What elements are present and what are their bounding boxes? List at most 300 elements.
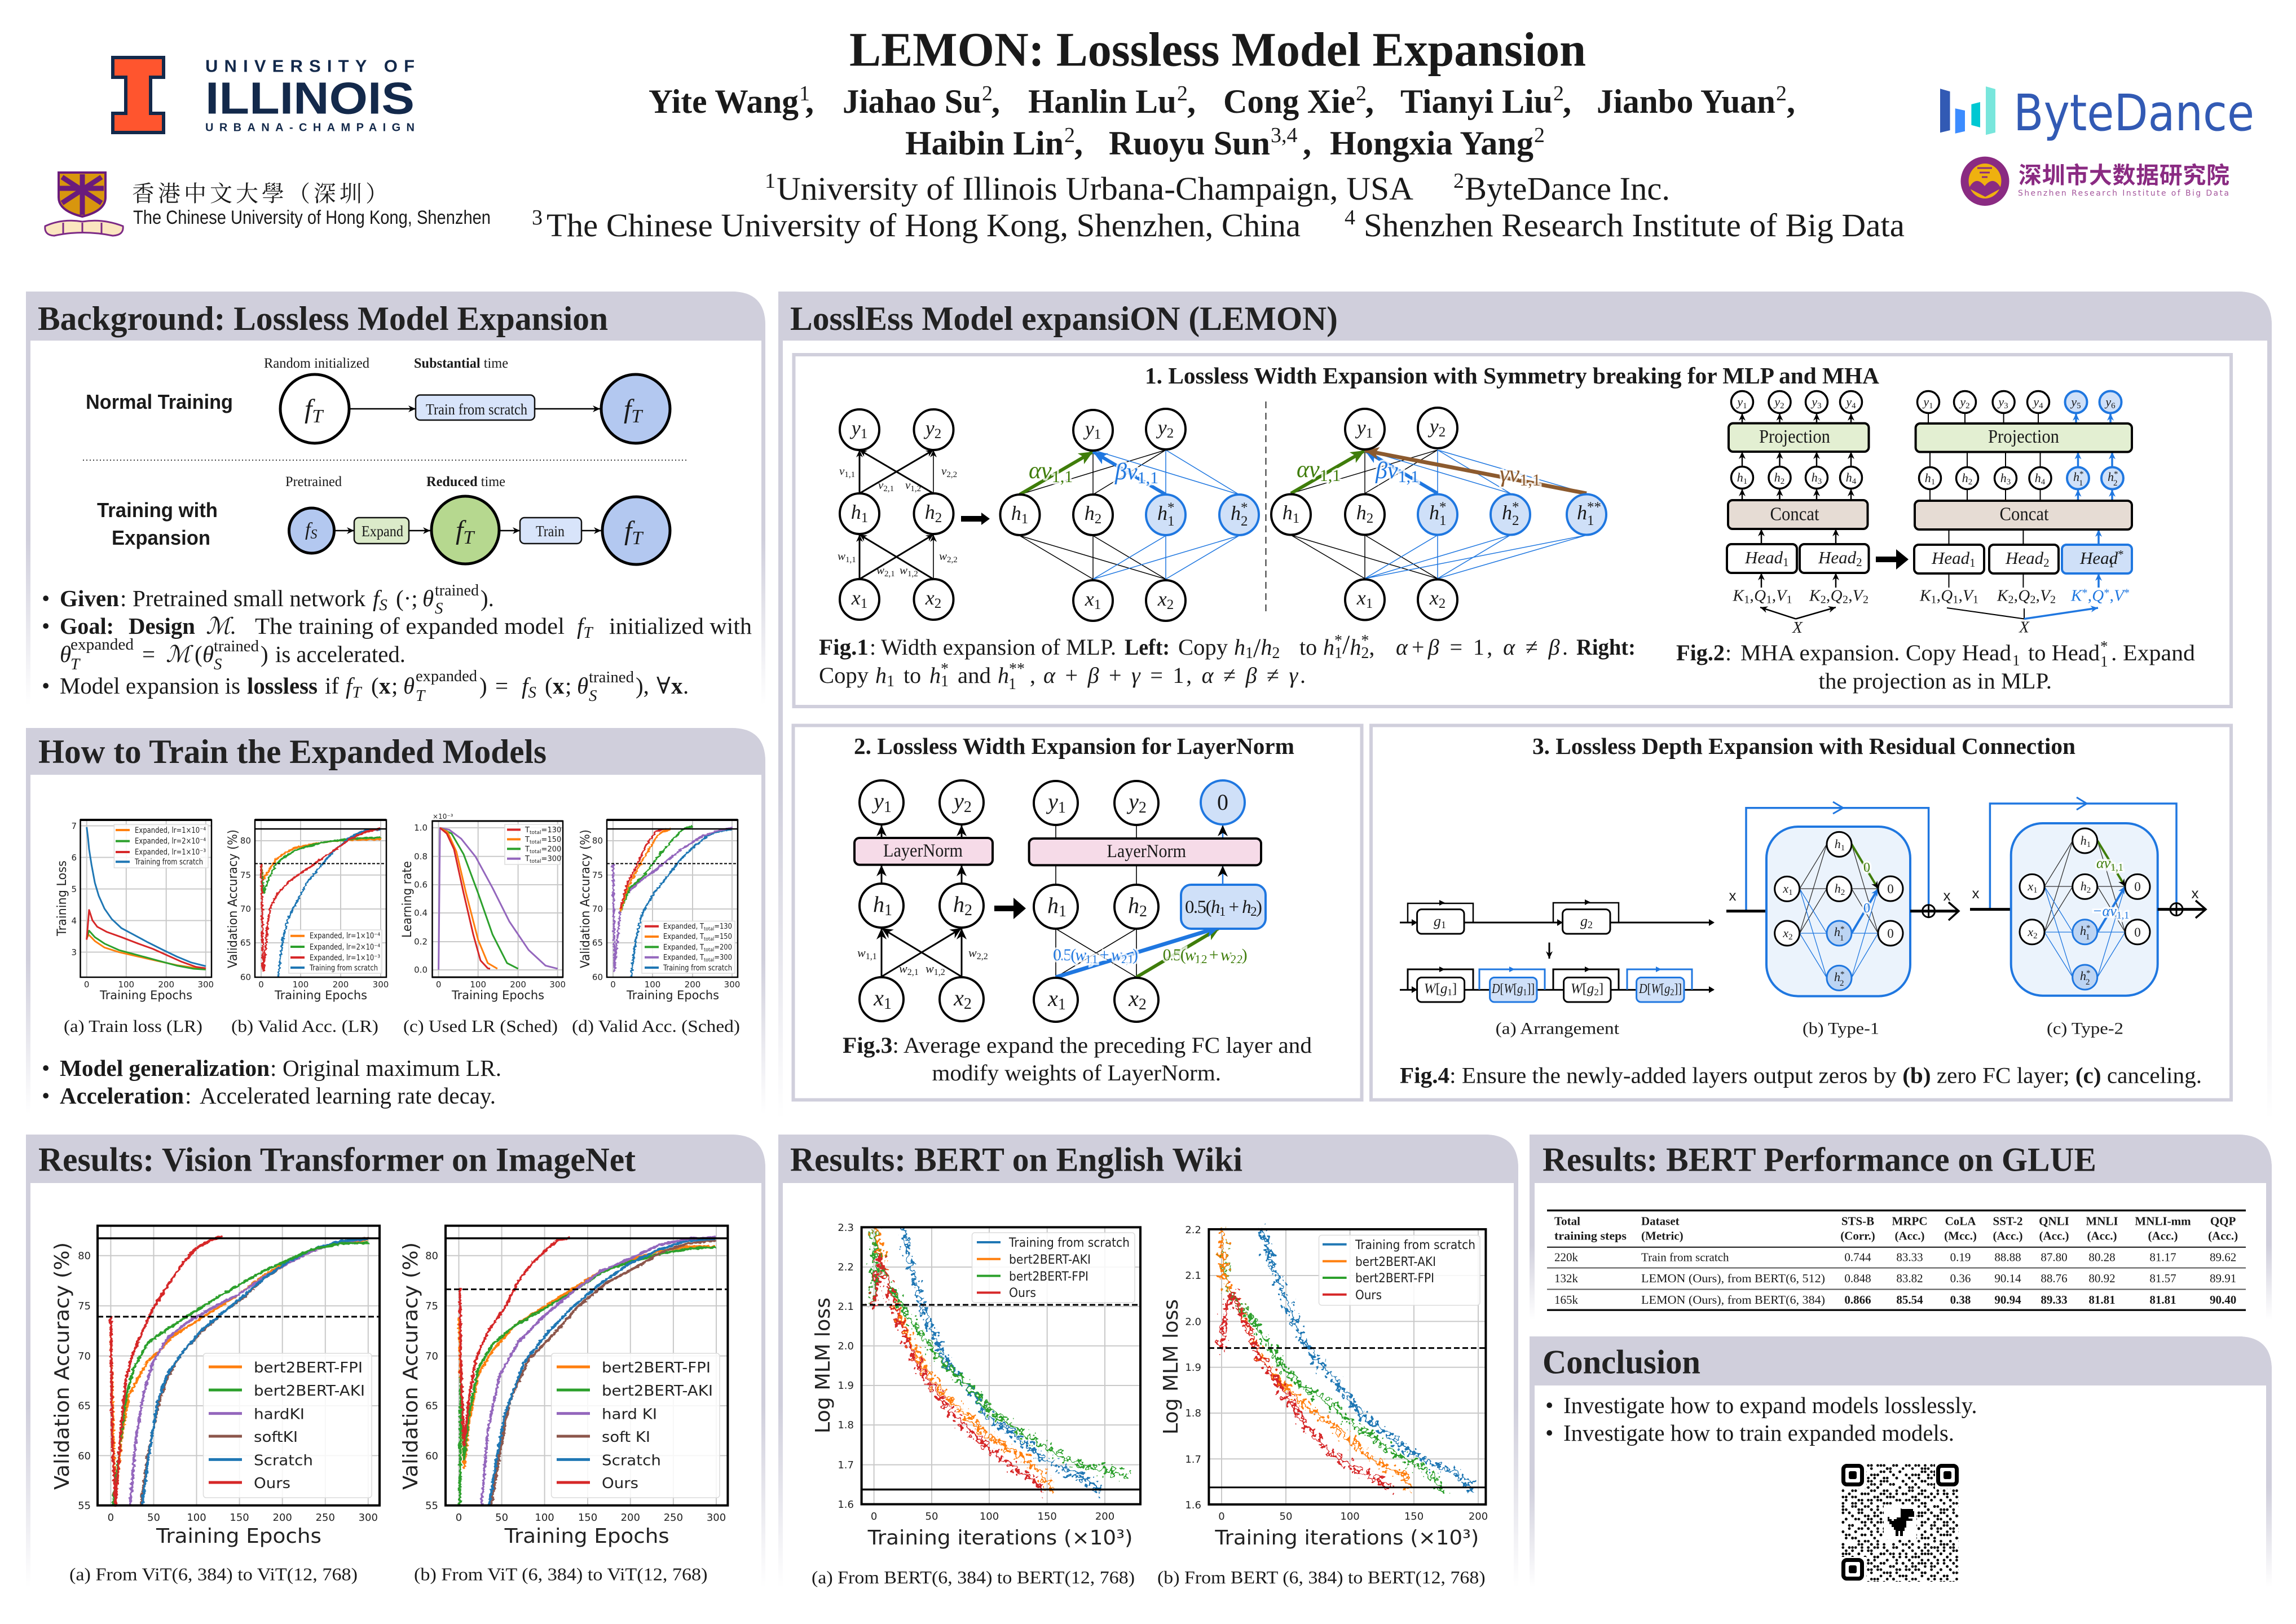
text block: background bullets: • xyxy=(42,585,50,611)
diagram: MHA expansion: h xyxy=(2108,470,2114,484)
caption: Fig.1: ** xyxy=(1009,660,1025,678)
chart: valid acc sched: total xyxy=(704,937,714,942)
diagram: MLP expansion right: * xyxy=(1439,500,1446,515)
diagram: MLP expansion right: 1 xyxy=(1293,511,1299,526)
diagram: LayerNorm original: y xyxy=(954,788,964,814)
diagram: type-2: 1 xyxy=(2086,933,2090,942)
chart: valid acc lr: 80 xyxy=(240,836,251,846)
text block: background bullets: T xyxy=(583,624,593,642)
diagram: LayerNorm expansion: ) xyxy=(1132,946,1138,964)
chart: ViT b: 200 xyxy=(621,1512,640,1524)
diagram: MLP original: 2 xyxy=(935,596,941,611)
caption: Fig.1: , xyxy=(1030,663,1035,688)
text block: training bullets: Model generalization xyxy=(60,1055,270,1081)
table: GLUE: 83.82 xyxy=(1896,1272,1923,1285)
chart: used lr: 200 xyxy=(510,979,526,990)
affiliations xyxy=(532,169,1905,244)
diagram: type-1: 2 xyxy=(1841,888,1845,897)
chart: valid acc lr: 60 xyxy=(240,972,251,982)
diagram: MLP original: v xyxy=(941,464,946,478)
diagram: LayerNorm expansion: 2,2 xyxy=(1231,952,1243,966)
diagram: type-1: h xyxy=(1835,837,1841,851)
chart: valid acc sched: 65 xyxy=(592,938,603,948)
diagram: LayerNorm expansion: x xyxy=(1129,986,1139,1011)
chart: valid acc sched xyxy=(579,820,740,1002)
diagram: MHA expansion: V xyxy=(2040,587,2050,605)
chart: BERT a: 1.7 xyxy=(838,1459,854,1471)
chart: ViT a: hardKI xyxy=(254,1406,305,1423)
diagram: MHA expansion: 2 xyxy=(1966,401,1970,411)
text block: background bullets: S xyxy=(589,687,597,705)
chart: ViT a: Validation Accuracy (%) xyxy=(51,1242,74,1490)
diagram: arrangement: W[g xyxy=(1424,981,1447,996)
chart: BERT a: 2.1 xyxy=(838,1301,854,1313)
diagram: MHA expansion: 1 xyxy=(1931,478,1935,487)
affiliations: ByteDance Inc. xyxy=(1465,170,1670,207)
caption: Fig.3: Fig.3: Average expand the preceding FC layer and xyxy=(843,1032,1312,1058)
authors: Cong Xie xyxy=(1223,83,1355,120)
diagram: MLP expansion right: x xyxy=(1430,586,1439,609)
chart: valid acc lr xyxy=(226,820,389,1002)
chart: BERT b: 1.6 xyxy=(1185,1499,1201,1511)
chart: BERT a: 2.2 xyxy=(838,1261,854,1273)
caption: Fig.1: α+β = 1, α ≠ β. xyxy=(1396,634,1568,660)
chart: BERT a: 1.8 xyxy=(838,1419,854,1431)
diagram: LayerNorm original: LayerNorm xyxy=(883,841,963,861)
QR code xyxy=(1840,1463,1961,1583)
diagram: MLP expansion left: 2 xyxy=(1167,597,1174,612)
chart: valid acc sched: 60 xyxy=(592,972,603,982)
caption: Fig.2: * xyxy=(2100,638,2108,655)
diagram: type-2: 0 xyxy=(2134,925,2141,939)
diagram: MHA expansion: , xyxy=(2088,587,2092,605)
text block: background bullets: S xyxy=(214,655,222,673)
diagram: LayerNorm expansion: w xyxy=(1111,946,1122,964)
chart: train loss: Expanded, lr=1×10⁻³ xyxy=(135,848,206,857)
authors: 2 xyxy=(1356,82,1367,105)
chart: used lr: 0.6 xyxy=(414,880,428,890)
table: GLUE: (Acc.) xyxy=(1993,1229,2023,1243)
diagram: MLP original: v xyxy=(878,478,883,492)
diagram: type-2 xyxy=(1970,797,2206,1038)
diagram: MHA expansion: Head xyxy=(2006,548,2043,568)
chart: BERT b: 200 xyxy=(1469,1511,1488,1522)
chart: used lr: total xyxy=(530,830,541,836)
text block: training bullets: • xyxy=(42,1055,50,1081)
chart: valid acc lr: Expanded, lr=2×10⁻⁴ xyxy=(310,943,380,952)
diagram: MHA original: V xyxy=(1776,587,1786,605)
text block: conclusion bullets: • xyxy=(1545,1420,1553,1446)
text block: conclusion bullets: • xyxy=(1545,1392,1553,1418)
diagram: normal training: T xyxy=(312,406,324,427)
chart: ViT b: bert2BERT-FPI xyxy=(602,1360,711,1376)
chart: train loss: Training Loss xyxy=(55,860,69,937)
diagram: MHA expansion: 6 xyxy=(2111,401,2116,411)
chart captions xyxy=(64,1016,740,1036)
logo: University of Illinois xyxy=(113,56,415,134)
diagram: type-2: h xyxy=(2080,924,2086,938)
chart: ViT a: 60 xyxy=(78,1450,91,1462)
diagram: LayerNorm original: 1 xyxy=(884,995,892,1013)
text block: background bullets: • xyxy=(42,673,50,699)
chart: train loss: Expanded, lr=1×10⁻⁴ xyxy=(135,826,206,835)
diagram: LayerNorm original: 2,2 xyxy=(977,952,988,961)
text block: background bullets: initialized with xyxy=(609,613,752,639)
chart: valid acc sched: 80 xyxy=(592,836,603,846)
diagram: LayerNorm expansion: 1 xyxy=(1058,799,1066,817)
diagram: MHA expansion xyxy=(1914,391,2132,637)
diagram: LayerNorm expansion: y xyxy=(1048,789,1058,814)
chart: valid acc sched: 70 xyxy=(592,904,603,914)
text block: background bullets: f xyxy=(522,673,528,699)
chart: BERT b: Log MLM loss xyxy=(1160,1299,1183,1435)
diagram: type-2: 1 xyxy=(2033,886,2038,895)
chart: used lr: =150 xyxy=(541,836,561,844)
table: GLUE: (Metric) xyxy=(1641,1229,1684,1243)
heading: LEMON: LosslEss Model expansiON (LEMON) xyxy=(790,300,1338,337)
authors: Tianyi Liu xyxy=(1400,83,1553,120)
chart: train loss: 7 xyxy=(71,821,77,831)
table: GLUE: 88.76 xyxy=(2041,1272,2068,1285)
text block: conclusion bullets: Investigate how to expand models losslessly. xyxy=(1563,1392,1977,1418)
chart: train loss xyxy=(55,820,214,1002)
chart: ViT a: 80 xyxy=(78,1250,91,1262)
chart: train loss: Training Epochs xyxy=(99,988,192,1002)
text block: background bullets: ( xyxy=(371,673,379,699)
diagram: MHA original: Head xyxy=(1818,548,1856,567)
chart: ViT a xyxy=(51,1226,380,1548)
chart: ViT b: 55 xyxy=(425,1500,438,1512)
diagram: type-1: 1 xyxy=(1841,844,1845,853)
diagram: type-2: −αv xyxy=(2092,903,2117,919)
diagram: MHA expansion: h xyxy=(2073,470,2079,484)
text block: background bullets: x xyxy=(553,673,565,699)
text block: background bullets: Design xyxy=(129,613,195,639)
diagram: MHA original: 2 xyxy=(1863,594,1868,606)
diagram: MHA expansion: * xyxy=(2079,470,2083,479)
diagram: type-1: x xyxy=(1783,881,1788,895)
diagram: LayerNorm expansion: + xyxy=(1225,897,1243,917)
panel: BERT on English Wiki xyxy=(778,1135,1518,1587)
diagram: MLP original: 2 xyxy=(935,510,942,526)
diagram: training with expansion: f xyxy=(624,516,632,546)
logo: University of Illinois: URBANA-CHAMPAIGN xyxy=(205,122,415,134)
diagram: MLP original: 2,2 xyxy=(947,555,958,564)
diagram: type-1: 0 xyxy=(1863,860,1870,875)
text block: background bullets: expanded xyxy=(416,667,477,685)
diagram: MHA expansion: , xyxy=(1959,587,1963,605)
chart: ViT b: 70 xyxy=(425,1351,438,1362)
diagram: MLP expansion left: x xyxy=(1085,588,1094,610)
diagram: MLP original: h xyxy=(851,501,861,523)
chart: ViT b: 100 xyxy=(535,1512,554,1524)
diagram: MHA original: Concat xyxy=(1770,504,1819,525)
diagram: MLP original: 2,2 xyxy=(946,470,957,479)
authors: , xyxy=(1303,125,1311,162)
diagram: MHA original: h xyxy=(1774,470,1781,484)
caption: Fig.1: 1 xyxy=(1334,645,1342,662)
diagram: MHA expansion: 2 xyxy=(2030,594,2035,606)
diagram: LayerNorm expansion: 1,1 xyxy=(1085,952,1098,966)
diagram: MHA original: , xyxy=(1826,587,1830,605)
chart: used lr: T xyxy=(525,845,530,854)
chart: ViT b xyxy=(399,1226,728,1548)
diagram: MHA expansion: 4 xyxy=(2039,401,2043,411)
diagram: type-2: 1,1 xyxy=(2110,862,2123,873)
text block: background bullets: expanded xyxy=(70,636,134,654)
chart: ViT b: 250 xyxy=(664,1512,683,1524)
caption: Fig.1: h xyxy=(1234,634,1245,660)
diagram: type-1: 0 xyxy=(1863,901,1870,916)
text block: background bullets: S xyxy=(379,596,387,614)
text block: background bullets: if xyxy=(325,673,339,699)
chart captions: (c) Used LR (Sched) xyxy=(403,1016,558,1036)
chart: train loss: 200 xyxy=(158,979,174,990)
diagram: MHA expansion: 1 xyxy=(1929,401,1933,411)
diagram: LayerNorm original: w xyxy=(926,961,934,976)
chart: ViT b: 300 xyxy=(707,1512,726,1524)
table: GLUE: 90.40 xyxy=(2210,1293,2236,1307)
table: GLUE: 0.866 xyxy=(1844,1293,1871,1307)
diagram: MHA expansion: V xyxy=(2114,587,2124,605)
diagram: type-2: x xyxy=(2192,885,2198,902)
diagram: MHA expansion: , xyxy=(2036,587,2040,605)
diagram: MHA original: K xyxy=(1809,587,1820,605)
text block: background bullets: θ xyxy=(577,673,588,699)
text block: background bullets: ∀ xyxy=(656,673,671,699)
authors: , xyxy=(1187,83,1196,120)
diagram: MHA original: h xyxy=(1812,470,1818,484)
heading: section 2: 2. Lossless Width Expansion for LayerNorm xyxy=(854,733,1294,759)
diagram: MLP original xyxy=(838,409,958,620)
text block: training bullets: Original maximum LR. xyxy=(283,1055,501,1081)
diagram: type-1: 2 xyxy=(1788,933,1793,942)
chart: valid acc sched: Validation Accuracy (%) xyxy=(579,829,593,968)
chart: ViT a: softKI xyxy=(254,1429,298,1446)
caption: Fig.1: Right: xyxy=(1576,634,1636,660)
diagram: MHA expansion: Q xyxy=(1941,587,1953,605)
diagram: MLP expansion right: 1 xyxy=(1587,513,1594,528)
text block: background bullets: The training of expanded model xyxy=(255,613,565,639)
chart: train loss: 0 xyxy=(84,979,89,990)
affiliations: Shenzhen Research Institute of Big Data xyxy=(1364,207,1905,244)
authors: 2 xyxy=(1534,123,1545,147)
diagram: MHA original: Q xyxy=(1754,587,1766,605)
diagram: MHA original: y xyxy=(1846,395,1852,409)
diagram: MHA original: 1 xyxy=(1783,555,1789,569)
text block: background bullets: lossless xyxy=(247,673,318,699)
diagram: LayerNorm original: w xyxy=(899,961,907,976)
chart: ViT b: 0 xyxy=(456,1512,462,1524)
diagram: MLP expansion left: h xyxy=(1085,502,1095,524)
diagram: arrangement: ]] xyxy=(1674,982,1682,996)
logo: CUHK Shenzhen xyxy=(45,173,491,236)
diagram: MHA expansion: Q xyxy=(2018,587,2030,605)
diagram: MHA original: Projection xyxy=(1759,426,1830,447)
caption: Fig.1: α + β + γ = 1, α ≠ β ≠ γ. xyxy=(1043,663,1306,688)
diagram: MHA expansion: 1 xyxy=(1969,556,1976,570)
table: GLUE: QQP xyxy=(2210,1215,2236,1228)
table: GLUE: 0.848 xyxy=(1844,1272,1871,1285)
chart: valid acc sched: 75 xyxy=(592,870,603,880)
diagram: type-1: h xyxy=(1834,925,1840,939)
diagram: normal training: T xyxy=(631,406,643,427)
diagram: LayerNorm expansion: h xyxy=(1242,897,1251,917)
text block: background bullets: T xyxy=(70,655,81,673)
authors: 2 xyxy=(982,82,993,105)
panel: conclusion xyxy=(1530,1336,2272,1587)
chart: ViT a: 250 xyxy=(316,1512,335,1524)
caption: Fig.1: 1 xyxy=(1245,645,1253,662)
diagram: MLP original: x xyxy=(852,586,861,609)
box: section 1 xyxy=(794,355,2231,707)
diagram: MLP expansion right: 1,1 xyxy=(1398,467,1419,486)
text block: background bullets xyxy=(42,581,752,705)
panel: how to train xyxy=(26,728,765,1114)
diagram: LayerNorm expansion: LayerNorm xyxy=(1107,841,1186,862)
chart: ViT b: 60 xyxy=(425,1450,438,1462)
chart: BERT a: Ours xyxy=(1009,1286,1036,1300)
chart: used lr: 300 xyxy=(549,979,566,990)
diagram: MHA expansion: h xyxy=(1962,471,1968,485)
diagram: MHA original: 2 xyxy=(1781,477,1784,486)
diagram: MHA expansion: Head xyxy=(2080,548,2118,568)
table: GLUE: 89.91 xyxy=(2210,1272,2236,1285)
diagram: MLP expansion left: 1 xyxy=(1021,511,1028,527)
affiliations: The Chinese University of Hong Kong, Shenzhen, China xyxy=(547,207,1301,244)
caption: Fig.1: Copy xyxy=(1178,634,1228,660)
diagram: MLP expansion right: βv xyxy=(1376,458,1398,484)
table: GLUE: LEMON (Ours), from BERT(6, 384) xyxy=(1641,1293,1825,1307)
diagram: arrangement: g xyxy=(1434,913,1441,929)
affiliations: 3 xyxy=(532,206,543,230)
heading: section 1: 1. Lossless Width Expansion with Symmetry breaking for MLP and MHA xyxy=(1145,363,1879,389)
diagram: arrangement: ] xyxy=(1599,981,1603,996)
chart: BERT a: Training iterations (×10³) xyxy=(867,1526,1133,1550)
table: GLUE: 90.94 xyxy=(1994,1293,2021,1307)
diagram: arrangement: 1 xyxy=(1447,987,1452,998)
chart: train loss: 100 xyxy=(118,979,134,990)
table: GLUE: 81.81 xyxy=(2149,1293,2176,1307)
diagram: type-2: * xyxy=(2086,969,2090,978)
diagram: MHA original: Q xyxy=(1831,587,1843,605)
authors: Jianbo Yuan xyxy=(1597,83,1775,120)
chart captions: (b) Valid Acc. (LR) xyxy=(231,1016,378,1036)
chart: train loss: 5 xyxy=(71,884,77,894)
diagram: MLP expansion left: x xyxy=(1158,588,1167,610)
diagram: arrangement: 1 xyxy=(1523,987,1527,998)
diagram: MLP expansion right: 1,1 xyxy=(1519,471,1541,489)
diagram: MHA expansion: * xyxy=(2114,470,2118,479)
authors: Yite Wang xyxy=(649,83,799,120)
diagram: MHA original: 4 xyxy=(1852,401,1856,411)
diagram: MLP expansion left: βv xyxy=(1115,459,1138,485)
text block: background bullets: S xyxy=(435,599,443,617)
diagram: arrangement: 1 xyxy=(1441,919,1446,930)
chart: train loss: Training from scratch xyxy=(134,858,203,867)
diagram: MHA expansion: 1 xyxy=(1931,594,1937,606)
diagram: training with expansion: T xyxy=(463,527,475,548)
authors: , xyxy=(1074,125,1083,162)
table: GLUE: 89.62 xyxy=(2210,1251,2236,1264)
diagram: MLP expansion left: h xyxy=(1157,502,1167,524)
diagram: LayerNorm original: 1 xyxy=(884,902,892,919)
chart: BERT b: 1.7 xyxy=(1185,1454,1201,1466)
diagram: type-1: 1 xyxy=(1788,888,1793,897)
diagram: MLP expansion right: 1 xyxy=(1366,426,1373,441)
diagram: LayerNorm expansion: 2 xyxy=(1250,904,1257,919)
diagram: type-1: * xyxy=(1840,925,1844,934)
box: section 3 xyxy=(1371,725,2231,1100)
diagram: LayerNorm original: 1 xyxy=(884,798,892,816)
chart: used lr: 100 xyxy=(470,979,486,990)
diagram: MHA original: 3 xyxy=(1817,401,1822,411)
diagram: type-2: (c) Type-2 xyxy=(2047,1020,2123,1038)
diagram: LayerNorm original: 2 xyxy=(964,902,972,919)
caption: Fig.1: Copy xyxy=(819,663,869,688)
diagram: MHA original: h xyxy=(1737,470,1743,484)
diagram: MHA expansion: Head xyxy=(1932,548,1969,568)
diagram: MLP original: w xyxy=(939,549,947,563)
chart captions: (a) Train loss (LR) xyxy=(64,1016,202,1036)
affiliations: 1 xyxy=(765,169,775,193)
table: GLUE: 87.80 xyxy=(2041,1251,2068,1264)
text block: background bullets: ℳ. xyxy=(206,613,236,639)
table: GLUE: 81.81 xyxy=(2088,1293,2116,1307)
chart: BERT a: 100 xyxy=(980,1511,999,1522)
authors: 2 xyxy=(1776,82,1787,105)
captions: BERT: (a) From BERT(6, 384) to BERT(12, 768) xyxy=(812,1567,1135,1587)
caption: Fig.1: 1 xyxy=(941,673,949,690)
diagram: normal training: f xyxy=(305,394,312,424)
diagram: type-2: 1 xyxy=(2087,840,2091,849)
diagram: type-2: 2 xyxy=(2087,886,2091,895)
chart: BERT a: Training from scratch xyxy=(1008,1236,1130,1250)
diagram: LayerNorm expansion: 2,1 xyxy=(1121,952,1134,966)
chart: BERT a: 2.3 xyxy=(838,1222,854,1234)
logo: University of Illinois: UNIVERSITY OF xyxy=(205,56,415,76)
diagram: MLP expansion right: γv xyxy=(1500,461,1519,487)
diagram: MLP expansion left: 1 xyxy=(1094,427,1101,442)
table: GLUE: training steps xyxy=(1554,1229,1627,1243)
text block: background bullets: x xyxy=(379,673,391,699)
text block: background bullets: ). xyxy=(481,585,494,611)
chart: ViT a: 75 xyxy=(78,1300,91,1312)
text block: training bullets: Acceleration xyxy=(60,1083,184,1109)
diagram: MHA expansion: y xyxy=(1923,395,1929,409)
diagram: LayerNorm expansion: ) xyxy=(1242,946,1248,964)
chart: ViT a: 100 xyxy=(187,1512,206,1524)
chart: used lr: total xyxy=(530,840,541,845)
table: GLUE: SST-2 xyxy=(1993,1215,2022,1228)
diagram: type-2: x xyxy=(1972,885,1980,902)
caption: Fig.1: h xyxy=(1350,634,1361,660)
table: GLUE: 0.19 xyxy=(1950,1251,1971,1264)
text block: background bullets: . xyxy=(683,673,689,699)
authors: , xyxy=(991,83,1000,120)
diagram: LayerNorm expansion: 0 xyxy=(1217,789,1228,815)
diagram: MHA expansion: * xyxy=(2118,548,2124,561)
table: GLUE: 0.36 xyxy=(1950,1272,1971,1285)
diagram: LayerNorm original: h xyxy=(953,892,964,917)
diagram: MLP expansion left: * xyxy=(1167,500,1174,515)
chart: used lr: total xyxy=(530,849,541,855)
chart: BERT b: Training from scratch xyxy=(1355,1238,1475,1252)
chart: BERT a xyxy=(812,1222,1140,1550)
diagram: MLP expansion right: 1,1 xyxy=(1320,466,1341,485)
diagram: MHA original: 1 xyxy=(1766,594,1771,606)
diagram: LayerNorm original: 2 xyxy=(964,798,972,816)
